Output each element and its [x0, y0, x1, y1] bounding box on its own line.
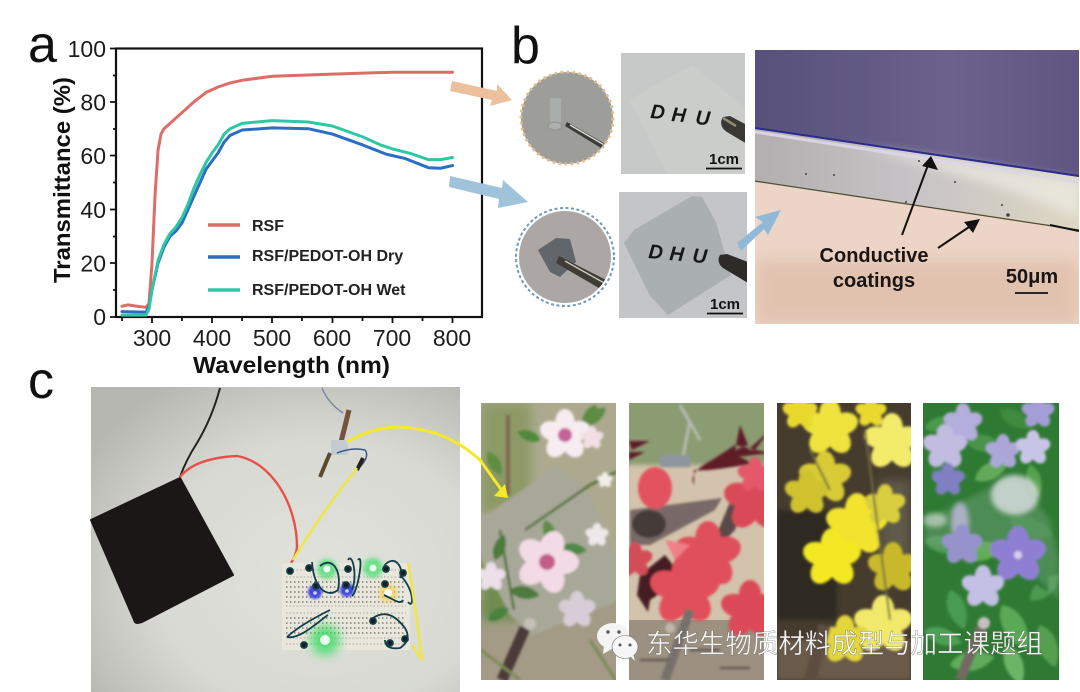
- legend: RSF/PEDOT-OH Wet: [252, 282, 406, 299]
- y axis ticks and labels: 100: [68, 36, 106, 62]
- y axis ticks and labels: 80: [80, 90, 106, 116]
- curve: RSF/PEDOT-OH Wet: [122, 121, 452, 315]
- photo: clear RSF film on DHU text: [621, 53, 747, 174]
- yellow jumper wires: [293, 468, 422, 660]
- jumper wires: [287, 558, 412, 648]
- micrograph: film cross-section: [755, 50, 1079, 324]
- watermark: group name: 东华生物质材料成型与加工课题组: [646, 629, 1043, 659]
- x axis ticks and labels: [122, 317, 471, 351]
- arrow: blue, coated curve to coated film: [449, 176, 528, 208]
- legend: [208, 218, 406, 299]
- film label letters: [648, 241, 708, 268]
- legend: RSF/PEDOT-OH Dry: [252, 248, 403, 265]
- y axis ticks and labels: 20: [80, 250, 106, 276]
- photo: red blossom behind film: [629, 403, 764, 680]
- film label letters: H: [669, 243, 685, 266]
- photo: periwinkle flowers behind film: [923, 403, 1059, 680]
- tweezers: [721, 116, 745, 143]
- red flowers: [638, 467, 672, 509]
- scale bar: 1cm: 1cm: [709, 151, 739, 168]
- legend: RSF: [252, 218, 284, 235]
- callout text: Conductive: [820, 245, 928, 267]
- periwinkle flowers: [942, 403, 984, 443]
- red wire: [180, 456, 297, 563]
- inset: coated film held by tweezers: [516, 208, 614, 306]
- battery box: [91, 478, 233, 623]
- LED glows: [308, 558, 397, 655]
- panel label a: a: [28, 16, 57, 74]
- film label letters: H: [671, 104, 687, 127]
- arrow: blue, film to micrograph: [737, 210, 781, 251]
- arrow: orange, RSF curve to clear film: [450, 81, 512, 106]
- photo: yellow flowers behind film: [777, 403, 911, 680]
- film label letters: [650, 101, 711, 130]
- photo: blue-gray coated film on DHU text: [619, 192, 748, 318]
- watermark: WeChat icon: [597, 623, 638, 661]
- film overlay: [482, 465, 615, 635]
- panel label b: b: [511, 17, 540, 75]
- film label letters: D: [650, 101, 666, 124]
- x axis ticks and labels: 700: [373, 325, 411, 351]
- film haze: [925, 475, 1059, 600]
- curves: [122, 72, 452, 315]
- tweezers: [719, 254, 748, 283]
- curve: RSF/PEDOT-OH Dry: [122, 128, 452, 312]
- film overlay: [630, 498, 722, 545]
- photo: white-pink blossom behind film: [475, 402, 616, 680]
- callout text: [820, 245, 928, 292]
- film label letters: U: [695, 107, 711, 130]
- film label letters: U: [692, 245, 708, 268]
- callout arrows: [902, 156, 980, 248]
- x axis ticks and labels: 600: [313, 325, 351, 351]
- black wire: [180, 388, 220, 477]
- scale bar: 1cm: 1cm: [710, 296, 740, 313]
- x axis ticks and labels: 800: [433, 325, 471, 351]
- chart frame: [116, 48, 482, 317]
- green leaves: [924, 408, 1059, 680]
- photo: battery and breadboard circuit: [91, 387, 460, 692]
- panel a: transmittance line chart: [49, 36, 482, 378]
- x axis ticks and labels: 300: [133, 325, 171, 351]
- y axis title: Transmittance (%): [49, 77, 75, 283]
- x axis ticks and labels: 500: [253, 325, 291, 351]
- arrow: yellow wire leading to the film on the flower: [347, 427, 508, 498]
- dark leaves: [629, 425, 770, 485]
- clips and sample: [320, 388, 367, 477]
- y axis ticks and labels: 60: [80, 143, 106, 169]
- y axis ticks and labels: [68, 36, 116, 330]
- y axis ticks and labels: 0: [93, 304, 106, 330]
- x axis ticks and labels: 400: [193, 325, 231, 351]
- blossom flowers: [537, 409, 593, 462]
- callout text: coatings: [833, 270, 915, 292]
- y axis ticks and labels: 40: [80, 197, 106, 223]
- breadboard: [282, 563, 410, 650]
- yellow flowers: [802, 403, 860, 455]
- panel label c: c: [28, 352, 54, 410]
- inset: clear film held by tweezers: [521, 72, 613, 164]
- curve: RSF: [122, 72, 452, 307]
- x axis title: Wavelength (nm): [193, 352, 390, 378]
- scale bar: 50 micrometres: 50μm: [1006, 266, 1058, 288]
- film label letters: D: [648, 241, 664, 264]
